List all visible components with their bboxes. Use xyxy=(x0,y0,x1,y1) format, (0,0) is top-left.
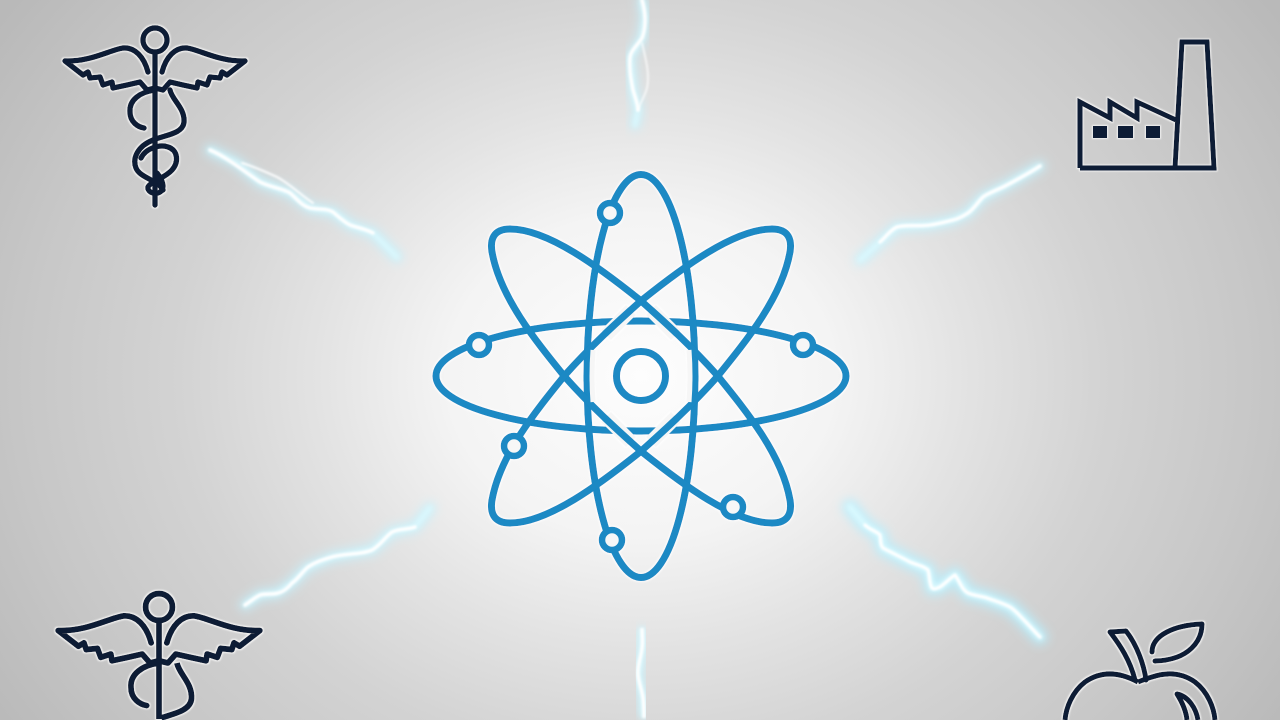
lightning bolt: upper left xyxy=(210,150,397,257)
nucleus xyxy=(616,352,666,400)
electrons xyxy=(469,203,813,550)
lightning bolt: top xyxy=(630,0,648,125)
icon: caduceus, lower left xyxy=(58,594,260,719)
icon: atom xyxy=(436,174,846,578)
icon: caduceus, upper left xyxy=(65,28,245,205)
lightning bolt: upper right xyxy=(860,166,1040,260)
lightning bolt: lower right xyxy=(850,507,1040,637)
icon: apple xyxy=(1065,624,1215,720)
icon: factory xyxy=(1080,42,1214,168)
lightning bolt: bottom xyxy=(638,628,644,718)
factory windows xyxy=(1093,126,1160,138)
lightning bolt: lower left xyxy=(245,508,430,605)
